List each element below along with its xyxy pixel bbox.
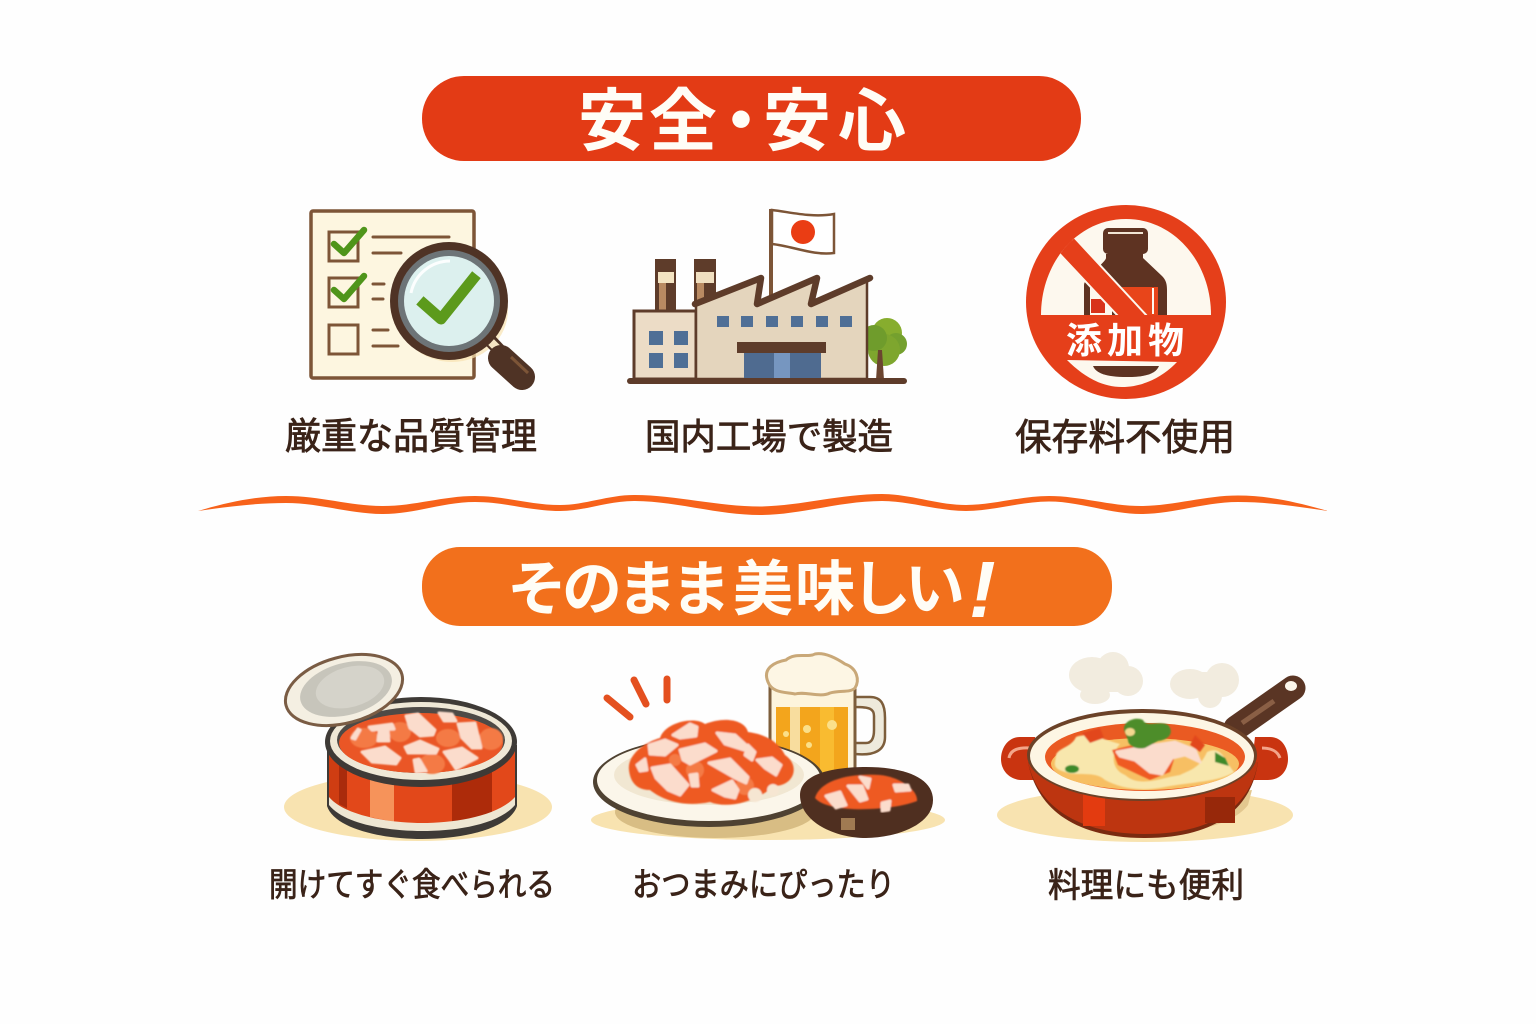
heading: tasty as it is: そのまま美味しい	[507, 556, 965, 623]
heading: tasty as it is	[422, 545, 1112, 634]
label: ready to eat on opening: 開けてすぐ食べられる	[269, 866, 555, 903]
label: made in a domestic factory: 国内工場で製造	[645, 416, 893, 457]
panel: safety section	[285, 76, 1235, 458]
divider: wavy line	[198, 494, 1328, 515]
icon: checklist with magnifier	[311, 211, 528, 378]
heading: safety: 安全・安心	[578, 84, 906, 160]
icon: no additives sign: 添加物	[1066, 320, 1184, 361]
label: handy for cooking: 料理にも便利	[1048, 867, 1244, 905]
heading: safety	[422, 76, 1081, 161]
label: perfect as a snack: おつまみにぴったり	[632, 866, 895, 903]
heading: tasty as it is: !	[969, 545, 996, 634]
infographic canvas	[198, 76, 1327, 900]
icon: opened can	[278, 643, 552, 841]
label: no preservatives: 保存料不使用	[1015, 417, 1235, 458]
label: strict quality control: 厳重な品質管理	[285, 416, 537, 457]
icon: factory with Japanese flag	[627, 209, 907, 384]
icon: no additives sign	[1026, 205, 1226, 399]
icon: plate with beer and side bowl	[591, 654, 945, 840]
icon: steaming pan dish	[997, 652, 1297, 842]
panel: tasty section	[269, 545, 1297, 905]
